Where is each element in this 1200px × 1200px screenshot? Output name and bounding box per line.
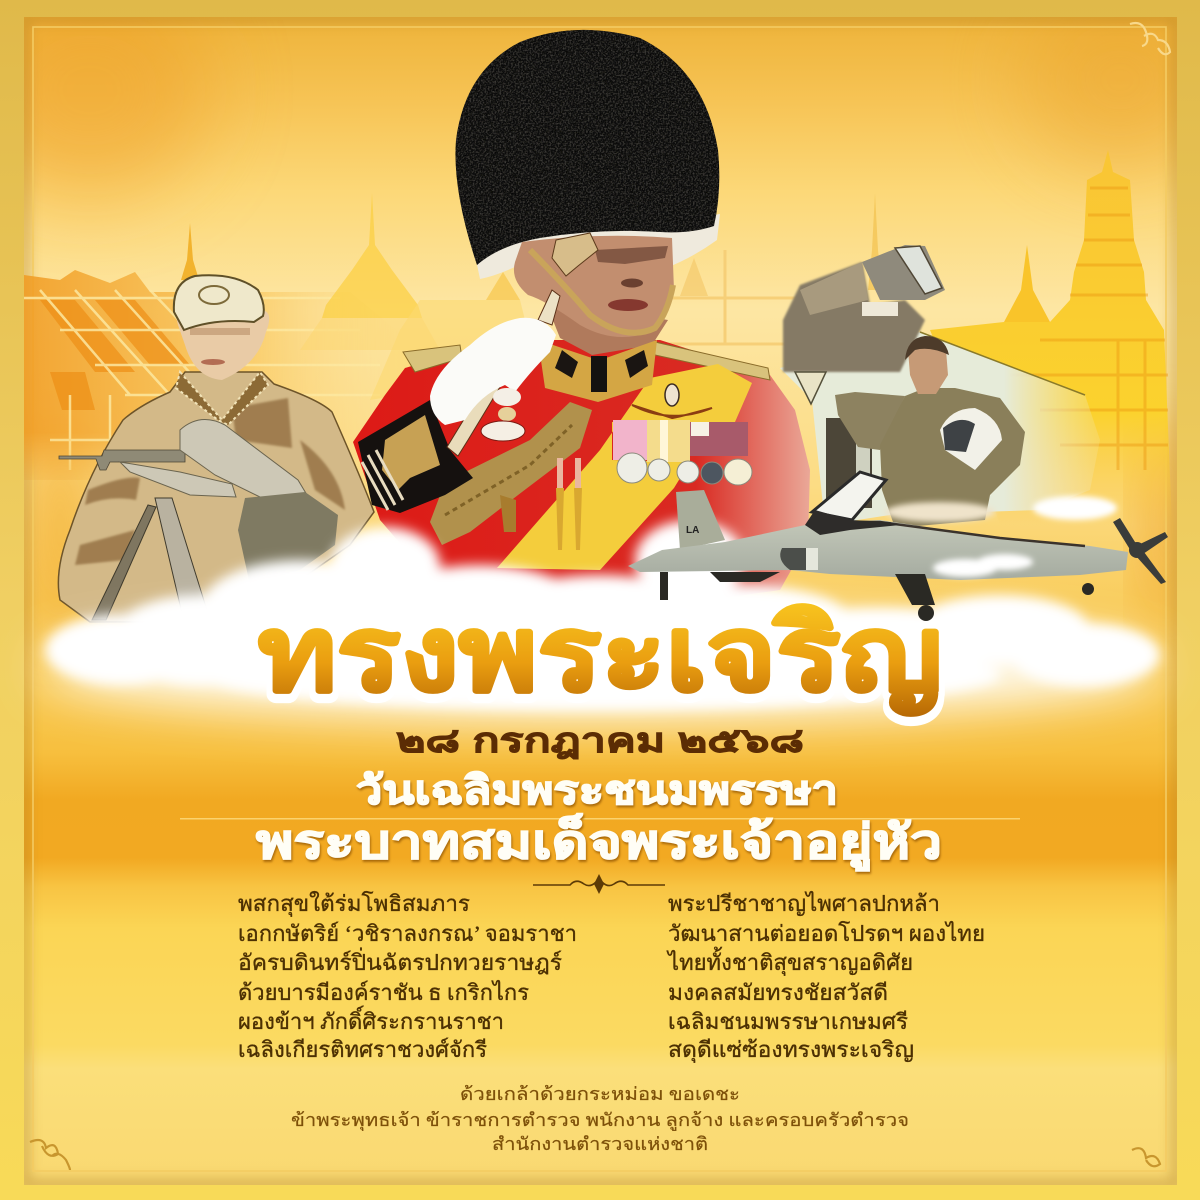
face — [514, 236, 674, 337]
jacket — [58, 372, 374, 622]
gold chin strap — [530, 250, 673, 333]
mouth — [201, 359, 225, 365]
embroidered collar — [538, 340, 657, 402]
collar centre — [591, 356, 607, 392]
temple skyline right — [668, 150, 1172, 525]
scabbard — [447, 380, 500, 456]
title outline: ทรงพระเจริญ — [258, 601, 942, 720]
clouds over jet — [885, 496, 1117, 577]
red jacket — [353, 340, 810, 610]
left stupa — [322, 193, 422, 318]
orange wash right side — [1139, 410, 1191, 630]
cap badge — [199, 286, 229, 304]
helmet visor — [895, 246, 942, 294]
small chedi behind king — [486, 272, 520, 300]
pilot raised arm — [835, 392, 905, 450]
rope texture — [445, 425, 572, 515]
orange wash left side — [24, 442, 98, 632]
warning triangle — [795, 372, 826, 404]
pilot suit — [880, 388, 1025, 528]
right figure: pilot with aircraft behind — [780, 245, 1100, 528]
rifle — [59, 450, 185, 470]
orange wash top left — [0, 0, 210, 200]
nose — [621, 278, 643, 288]
medals — [617, 453, 752, 485]
central figure: king in red ceremonial uniform — [353, 30, 810, 610]
hat brim — [476, 214, 720, 279]
tripod — [92, 498, 210, 622]
neck — [545, 300, 668, 355]
orange wash top right — [1020, 33, 1177, 194]
bearskin hat — [455, 30, 719, 265]
poem left column: เฉลิงเกียรติทศราชวงศ์จักรี — [238, 1037, 487, 1062]
checkered scarf — [176, 372, 268, 425]
neck and face — [176, 309, 269, 380]
propeller — [1113, 518, 1168, 584]
central small spire — [680, 258, 708, 296]
eye shadow — [190, 328, 250, 335]
fuselage top line — [810, 522, 1085, 546]
cloud haze — [40, 618, 1160, 718]
gold highlight line — [180, 818, 1020, 820]
embroidered cuff — [358, 400, 473, 513]
gold tag — [500, 495, 516, 532]
heading line 2: พระบาทสมเด็จพระเจ้าอยู่หัว — [256, 812, 942, 872]
poem right column: วัฒนาสานต่อยอดโปรดฯ ผองไทย — [668, 921, 985, 946]
fighter jet — [628, 472, 1168, 621]
left figure: young soldier with rifle — [58, 275, 374, 622]
silver arms — [120, 420, 310, 500]
title — [258, 597, 942, 720]
left palace roof lines — [24, 290, 380, 470]
sword hilt ornament — [552, 233, 598, 276]
poem left column: พสกสุขใต้ร่มโพธิสมภาร — [238, 891, 470, 917]
eyes shadow — [595, 246, 668, 264]
poem left column: ผองข้าฯ ภักดิ์ศิระกรานราชา — [238, 1006, 504, 1034]
poem right column — [666, 891, 985, 1063]
left spire small — [181, 223, 199, 280]
poem left column — [238, 891, 577, 1062]
cuff stripes — [362, 450, 403, 510]
cockpit — [805, 510, 900, 535]
footer credit: สำนักงานตำรวจแห่งชาติ — [492, 1134, 708, 1154]
poem right column: เฉลิมชนมพรรษาเกษมศรี — [668, 1009, 908, 1034]
flight helmet white — [940, 408, 1002, 470]
temple skyline left — [24, 270, 440, 480]
olive gear — [238, 492, 338, 585]
pendant — [665, 384, 679, 406]
upper pilot torso highlight — [800, 262, 868, 315]
fuselage edge — [920, 332, 1085, 395]
title fill: ทรงพระเจริญ — [258, 597, 942, 716]
cap — [174, 275, 264, 330]
date: ๒๘ กรกฎาคม ๒๕๖๘ — [396, 722, 804, 760]
tail fin — [676, 490, 725, 550]
medal ribbons — [613, 420, 748, 462]
seated pilot body — [783, 262, 925, 372]
gold rope aiguillette — [430, 402, 592, 545]
helmet dark shell — [943, 420, 975, 452]
gold tassels — [556, 488, 582, 550]
footer credit — [291, 1084, 909, 1154]
landing gear — [660, 572, 1094, 621]
golden prang — [930, 150, 1172, 525]
pilot face — [908, 344, 948, 394]
left palace roof — [24, 270, 346, 480]
right epaulette — [655, 342, 770, 380]
aircraft fuselage pale — [780, 332, 1100, 525]
canopy — [812, 472, 886, 520]
sword handle — [538, 290, 560, 325]
pilot mask — [862, 302, 898, 316]
white glove — [430, 318, 556, 425]
chest badges — [481, 388, 525, 441]
tail markings: LA — [686, 525, 699, 536]
poem right column: มงคลสมัยทรงชัยสวัสดี — [668, 980, 888, 1005]
poem right column: สดุดีแซ่ซ้องทรงพระเจริญ — [668, 1037, 914, 1063]
lips — [608, 299, 648, 311]
heading line 1: วันเฉลิมพระชนมพรรษา — [356, 769, 838, 813]
air intake — [780, 548, 806, 570]
pale hall right of king — [668, 250, 815, 345]
golden chedi — [1004, 245, 1050, 322]
footer credit: ข้าพระพุทธเจ้า ข้าราชการตำรวจ พนักงาน ลูกจ้าง และครอบครัวตำรวจ — [291, 1110, 909, 1131]
left stupa base — [300, 318, 440, 350]
left epaulette — [403, 345, 462, 372]
jacket shadows — [75, 398, 345, 565]
pale tassel cords — [557, 458, 581, 490]
flight helmet canopy — [862, 245, 945, 300]
cloud bank — [40, 520, 1160, 718]
ladder — [826, 418, 872, 508]
ornament divider — [533, 874, 665, 894]
yellow sash — [497, 364, 752, 570]
collar scroll darks — [555, 350, 648, 378]
cuff gold leaf — [382, 415, 440, 490]
cloud body — [45, 520, 1160, 710]
poem right column: พระปรีชาชาญไพศาลปกหล้า — [668, 891, 940, 916]
ladder light slot — [856, 430, 870, 476]
poem left column: ด้วยบารมีองค์ราชัน ธ เกริกไกร — [238, 980, 529, 1005]
poem left column: เอกกษัตริย์ ‘วชิราลงกรณ’ จอมราชา — [238, 921, 577, 946]
hall behind king — [370, 300, 530, 400]
wings badge — [632, 405, 712, 418]
poem left column: อัครบดินทร์ปิ่นฉัตรปกทวยราษฎร์ — [238, 947, 562, 975]
pilot hair — [905, 336, 949, 360]
dark orange roof panes — [40, 300, 190, 410]
white intake cover — [806, 548, 818, 570]
poem right column: ไทยทั้งชาติสุขสราญอดิศัย — [666, 947, 913, 976]
fuselage — [628, 520, 1128, 580]
prang banding — [1010, 188, 1168, 470]
slim spire — [868, 193, 882, 290]
footer credit: ด้วยเกล้าด้วยกระหม่อม ขอเดชะ — [460, 1084, 740, 1104]
